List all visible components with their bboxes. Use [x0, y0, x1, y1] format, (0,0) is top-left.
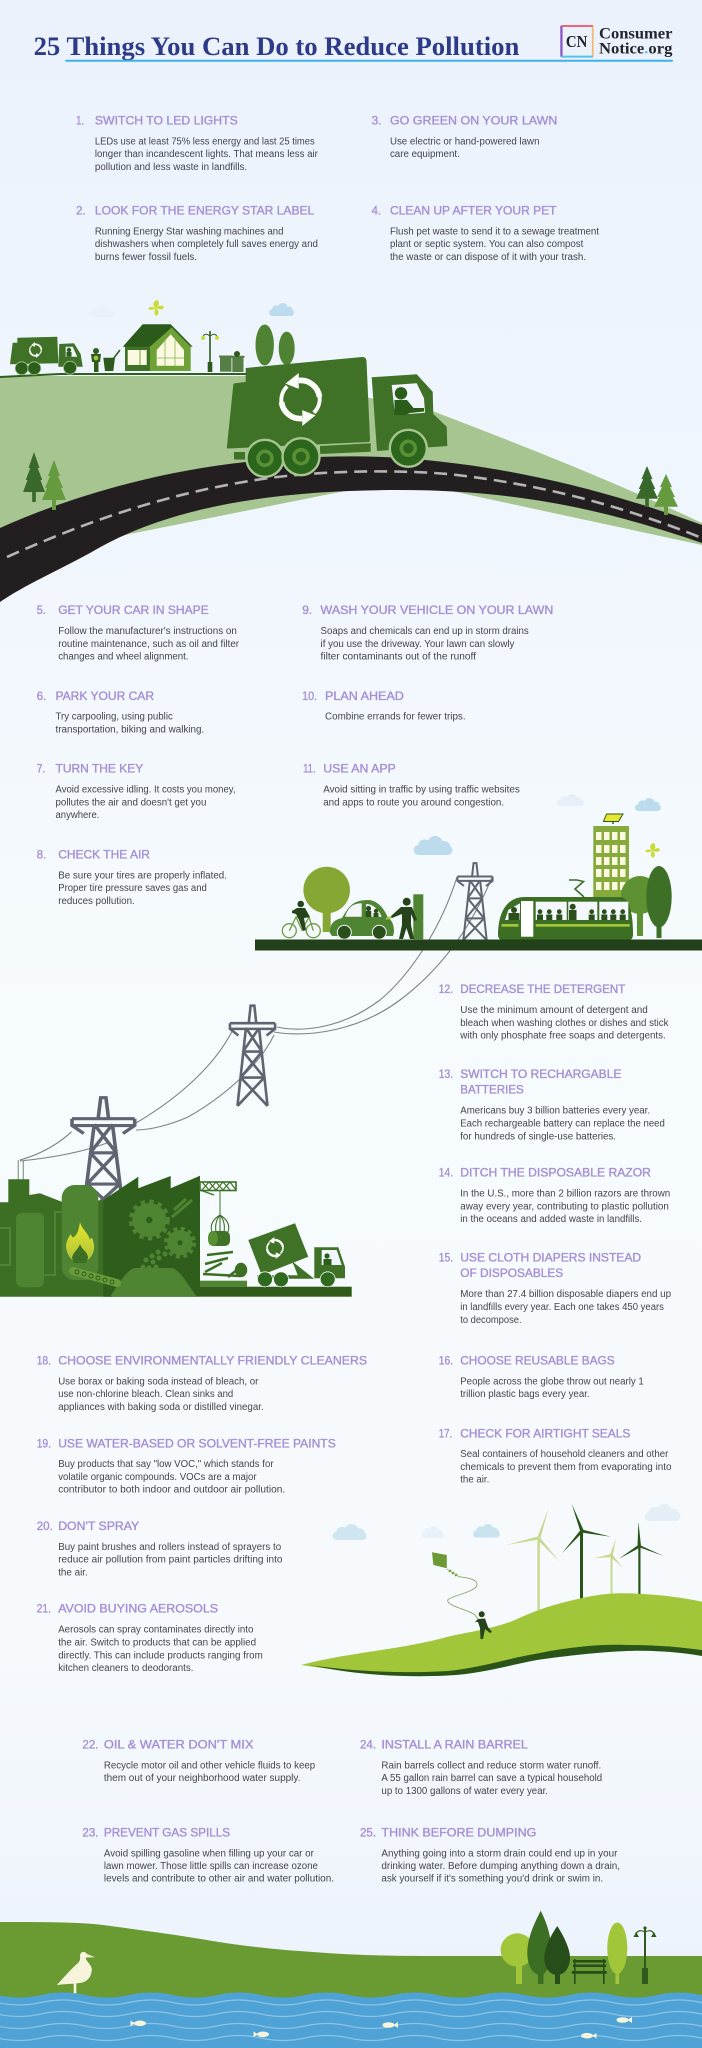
illustration: recycling factory [0, 1160, 352, 1297]
tip 23: lawn mower. Those little spills can increase ozone [104, 1860, 318, 1872]
tip 8: CHECK THE AIR [58, 848, 150, 862]
pine trees left [23, 452, 66, 510]
tip 22 [82, 1738, 316, 1784]
tip 14: 14. [439, 1167, 453, 1180]
tip 16: 16. [439, 1354, 453, 1368]
tip 17: the air. [460, 1473, 489, 1485]
tip 18: appliances with baking soda or distilled vinegar. [58, 1401, 264, 1413]
tip 23: 23. [82, 1826, 98, 1840]
hill [301, 1593, 702, 1674]
tip 24: up to 1300 gallons of water every year. [381, 1785, 548, 1797]
tip 6: Try carpooling, using public [56, 710, 173, 722]
tip 13: for hundreds of single-use batteries. [460, 1130, 616, 1142]
logo: Notice.org [599, 40, 672, 57]
trash cans [219, 351, 244, 372]
tip 21: kitchen cleaners to deodorants. [58, 1662, 193, 1673]
tip 5 [37, 604, 239, 662]
park trees [501, 1911, 627, 1984]
mound [110, 1268, 197, 1297]
illustration: green city [255, 794, 702, 950]
tip 8: reduces pollution. [58, 895, 135, 907]
tip 2: 2. [76, 204, 86, 218]
tip 2 [76, 204, 318, 263]
flame [66, 1222, 94, 1263]
tip 15: 15. [439, 1251, 453, 1265]
ground strip [0, 373, 248, 378]
icon: clouds [332, 1504, 680, 1540]
green land [0, 1922, 702, 2000]
heron [57, 1952, 95, 1997]
tip 5: Follow the manufacturer's instructions on [58, 625, 237, 637]
icon: clouds [414, 794, 661, 855]
tip 4: plant or septic system. You can also compost [390, 238, 584, 250]
tip 15: to decompose. [460, 1314, 522, 1325]
tip 17 [439, 1427, 672, 1485]
tip 3: Use electric or hand-powered lawn [390, 135, 539, 147]
left building [0, 1179, 112, 1297]
tip 23: Avoid spilling gasoline when filling up your car or [104, 1847, 314, 1859]
tip 1: pollution and less waste in landfills. [95, 161, 247, 173]
pine trees right [636, 466, 678, 515]
tip 23: levels and contribute to other air and water pollution. [104, 1872, 334, 1884]
tip 3: 3. [372, 114, 381, 128]
tip 19: 19. [37, 1437, 51, 1451]
tip 9: filter contaminants out of the runoff [321, 650, 477, 662]
tip 13: SWITCH TO RECHARGABLE [460, 1068, 621, 1081]
tip 1: longer than incandescent lights. That means less air [95, 148, 318, 160]
tip 13: BATTERIES [460, 1084, 524, 1097]
car [330, 900, 394, 939]
tip 24: Rain barrels collect and reduce storm water runoff. [381, 1759, 601, 1771]
dump truck [248, 1223, 345, 1287]
tip 11: and apps to route you around congestion. [323, 796, 504, 808]
tip 23: PREVENT GAS SPILLS [104, 1826, 230, 1840]
tip 19: volatile organic compounds. VOCs are a major [58, 1471, 257, 1483]
panel: tips 12 to 15 [439, 983, 671, 1325]
tip 20 [37, 1520, 283, 1578]
tip 24: 24. [360, 1738, 376, 1752]
tip 22: Recycle motor oil and other vehicle fluids to keep [104, 1759, 316, 1771]
tip 1: LEDs use at least 75% less energy and last 25 times [95, 135, 315, 147]
tip 18: use non-chlorine bleach. Clean sinks and [58, 1388, 233, 1400]
title underline [65, 60, 673, 62]
tip 15 [439, 1251, 671, 1325]
tip 5: routine maintenance, such as oil and filter [58, 638, 239, 650]
tip 13: 13. [439, 1068, 453, 1081]
tip 24 [360, 1738, 602, 1797]
person with bin [91, 348, 120, 372]
tip 7: TURN THE KEY [56, 762, 144, 776]
tip 8: Proper tire pressure saves gas and [58, 882, 207, 894]
tip 22: 22. [82, 1738, 98, 1752]
cyclist [282, 901, 320, 938]
logo [561, 25, 672, 57]
tip 9: if you use the driveway. Your lawn can slowly [321, 638, 514, 650]
hill shadow [309, 1645, 702, 1676]
fish [130, 2017, 632, 2038]
tip 4: the waste or can dispose of it with your trash. [390, 251, 586, 263]
panel: tips 22 to 25 [82, 1738, 620, 1884]
pylon 2 [230, 1006, 275, 1106]
tip 10 [302, 690, 466, 722]
logo: Consumer [599, 25, 672, 42]
header [34, 25, 672, 61]
tip 25: 25. [360, 1826, 376, 1840]
charger and person [386, 894, 423, 939]
tip 11: Avoid sitting in traffic by using traffic websites [323, 783, 520, 795]
tall trees [256, 324, 295, 366]
tip 7: anywhere. [56, 809, 99, 821]
tip 1: SWITCH TO LED LIGHTS [95, 114, 238, 128]
tip 2: LOOK FOR THE ENERGY STAR LABEL [95, 204, 314, 218]
tip 3: GO GREEN ON YOUR LAWN [390, 114, 557, 128]
tip 25: Anything going into a storm drain could end up in your [381, 1847, 617, 1859]
sawtooth factory [103, 1176, 200, 1297]
tip 11: 11. [303, 762, 316, 776]
crane [200, 1182, 236, 1246]
tip 9 [302, 604, 553, 662]
pylon 3 [72, 1098, 135, 1218]
tip 20: Buy paint brushes and rollers instead of sprayers to [58, 1541, 281, 1553]
road [0, 456, 702, 602]
building [593, 814, 629, 902]
tip 16: trillion plastic bags every year. [460, 1388, 590, 1400]
title: 25 Things You Can Do to Reduce Pollution [34, 32, 519, 61]
child flying kite [475, 1611, 492, 1639]
tip 24: A 55 gallon rain barrel can save a typical household [381, 1772, 602, 1784]
tip 16 [439, 1354, 644, 1400]
tip 19: contributor to both indoor and outdoor air pollution. [58, 1483, 285, 1495]
tip 10: PLAN AHEAD [325, 690, 404, 703]
tip 12: DECREASE THE DETERGENT [460, 983, 626, 996]
ground bar [255, 940, 702, 950]
panel: tips 1 to 4 [76, 114, 600, 263]
tip 2: dishwashers when completely full saves energy and [95, 238, 318, 250]
tip 12 [439, 983, 668, 1041]
tip 6: PARK YOUR CAR [56, 690, 154, 703]
tip 17: CHECK FOR AIRTIGHT SEALS [460, 1427, 630, 1441]
tip 18: CHOOSE ENVIRONMENTALLY FRIENDLY CLEANERS [58, 1354, 367, 1368]
large recycling truck [227, 357, 447, 477]
tip 1 [76, 114, 318, 173]
tip 20: 20. [37, 1520, 53, 1533]
conveyor [73, 1270, 117, 1284]
pylon [457, 863, 493, 940]
tip 14 [439, 1167, 670, 1225]
tip 9: Soaps and chemicals can end up in storm drains [321, 625, 529, 637]
icon: butterfly [645, 843, 660, 858]
tip 19 [37, 1437, 336, 1495]
tip 7: pollutes the air and doesn't get you [56, 796, 206, 808]
icon: hill [0, 376, 702, 560]
round tree [303, 867, 350, 932]
gears [131, 1202, 194, 1257]
tip 9: 9. [302, 604, 312, 617]
tip 15: OF DISPOSABLES [460, 1267, 563, 1280]
tip 21 [37, 1603, 263, 1673]
chimney pipes [18, 1160, 23, 1180]
tip 3: care equipment. [390, 148, 460, 160]
tip 20: the air. [58, 1566, 88, 1578]
tip 10: 10. [302, 690, 317, 703]
tip 2: burns fewer fossil fuels. [95, 251, 197, 263]
river waves [0, 2000, 702, 2040]
tip 8: 8. [37, 848, 46, 862]
tip 21: directly. This can include products ranging from [58, 1649, 263, 1661]
tip 5: changes and wheel alignment. [58, 650, 188, 662]
tip 18 [37, 1354, 367, 1413]
river [0, 1992, 702, 2048]
bottom conveyor [200, 1281, 247, 1287]
tip 7 [37, 762, 235, 821]
tip 25: THINK BEFORE DUMPING [381, 1826, 536, 1840]
tip 6: transportation, biking and walking. [56, 723, 204, 735]
tanks [0, 1185, 98, 1287]
tip 8 [37, 848, 227, 907]
tip 3 [372, 114, 557, 160]
green debris [172, 1199, 192, 1217]
tip 9: WASH YOUR VEHICLE ON YOUR LAWN [321, 604, 553, 617]
tip 4 [372, 204, 600, 263]
tip 25 [360, 1826, 620, 1884]
house [123, 324, 193, 371]
pellets [140, 1250, 168, 1270]
tip 1: 1. [76, 114, 84, 128]
tip 22: them out of your neighborhood water supply. [104, 1772, 300, 1784]
tip 5: GET YOUR CAR IN SHAPE [58, 604, 209, 617]
lamp post [634, 1926, 656, 1984]
small recycling truck [10, 337, 83, 375]
bench [572, 1959, 607, 1984]
kite [432, 1552, 480, 1622]
illustration: wind turbine hill [301, 1504, 702, 1676]
tip 10: Combine errands for fewer trips. [325, 710, 466, 722]
tip 6: 6. [37, 690, 46, 703]
tip 21: AVOID BUYING AEROSOLS [58, 1603, 218, 1616]
tip 8: Be sure your tires are properly inflated. [58, 869, 227, 881]
tip 13 [439, 1068, 665, 1142]
tip 6 [37, 690, 204, 735]
illustration: park and river [0, 1911, 702, 2048]
tip 19: USE WATER-BASED OR SOLVENT-FREE PAINTS [58, 1437, 336, 1451]
tip 22: OIL & WATER DON'T MIX [104, 1738, 254, 1752]
tip 16: CHOOSE REUSABLE BAGS [460, 1354, 615, 1368]
tip 25: ask yourself if it's something you'd drink or swim in. [381, 1872, 603, 1884]
tip 7: 7. [37, 762, 45, 776]
tip 21: the air. Switch to products that can be applied [58, 1636, 256, 1648]
tip 17: 17. [439, 1427, 452, 1441]
illustration: recycling hill scene [0, 300, 702, 602]
tip 4: Flush pet waste to send it to a sewage treatment [390, 225, 600, 237]
wind turbines [506, 1504, 664, 1610]
tip 19: Buy products that say "low VOC," which stands for [58, 1458, 274, 1470]
power lines [20, 878, 492, 1161]
logo: CN [566, 33, 587, 51]
tip 5: 5. [37, 604, 46, 617]
tip 24: INSTALL A RAIN BARREL [381, 1738, 528, 1752]
tip 25: drinking water. Before dumping anything down a drain, [381, 1860, 620, 1872]
tip 11: USE AN APP [323, 762, 396, 776]
icon: butterfly [148, 300, 164, 316]
tip 4: 4. [372, 204, 381, 218]
tram [498, 880, 633, 940]
icon: faint cloud [89, 306, 115, 317]
tip 2: Running Energy Star washing machines and [95, 225, 283, 237]
street lamp [201, 331, 219, 372]
tip 18: 18. [37, 1354, 51, 1368]
logs [203, 1252, 246, 1277]
tip 4: CLEAN UP AFTER YOUR PET [390, 204, 557, 218]
tip 18: Use borax or baking soda instead of bleach, or [58, 1375, 258, 1387]
panel: tips 16 to 21 [37, 1354, 672, 1673]
tip 21: Aerosols can spray contaminates directly into [58, 1623, 254, 1635]
tip 7: Avoid excessive idling. It costs you money, [56, 783, 235, 795]
panel: tips 5 to 11 [37, 604, 553, 907]
tip 15: USE CLOTH DIAPERS INSTEAD [460, 1251, 641, 1265]
tip 23 [82, 1826, 334, 1884]
tip 20: reduce air pollution from paint particles drifting into [58, 1553, 283, 1565]
tip 11 [303, 762, 520, 808]
tip 12: 12. [439, 983, 453, 996]
tip 20: DON'T SPRAY [58, 1520, 140, 1533]
icon: cloud [269, 303, 294, 316]
trees right [621, 866, 672, 938]
tip 21: 21. [37, 1603, 51, 1616]
factory ground bar [200, 1287, 352, 1297]
